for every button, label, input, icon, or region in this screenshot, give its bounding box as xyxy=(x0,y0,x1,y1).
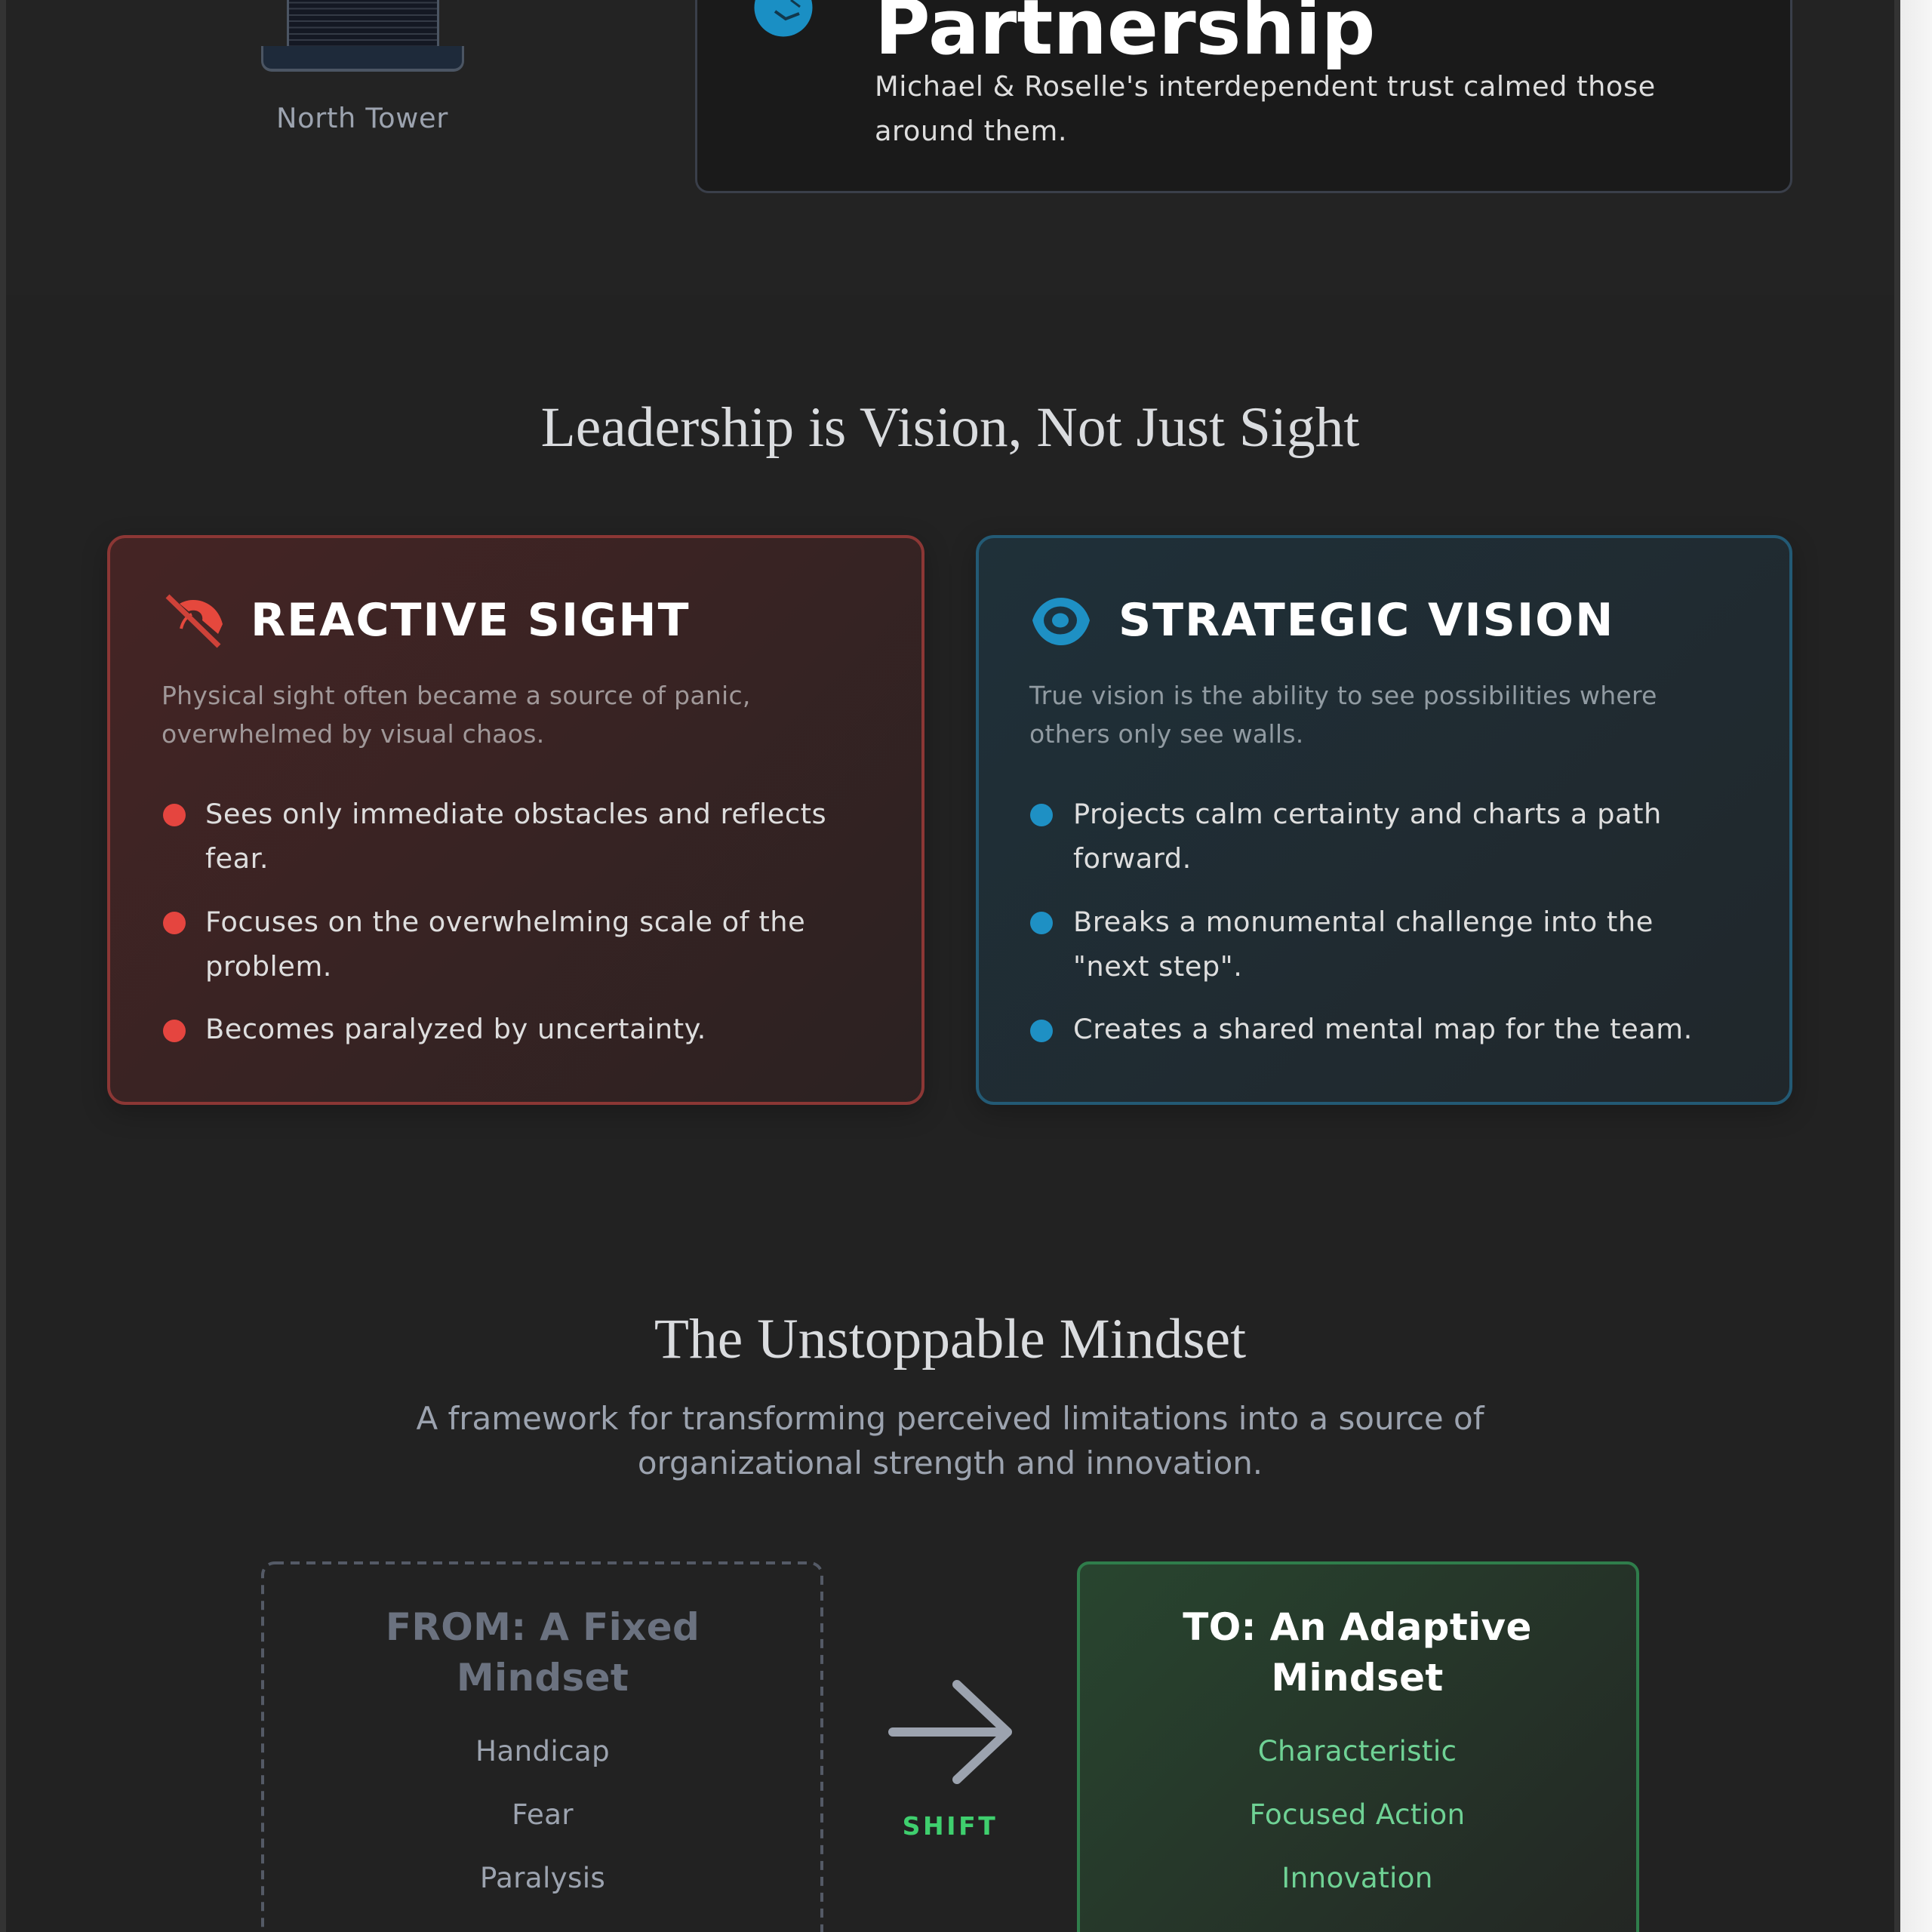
bullet 2 xyxy=(163,912,186,934)
shift label: SHIFT xyxy=(903,1811,998,1841)
bullet 1 xyxy=(163,804,186,826)
adaptive mindset text: Innovation xyxy=(1281,1861,1433,1894)
mindset subtitle: organizational strength and innovation. xyxy=(638,1444,1263,1481)
adaptive mindset text xyxy=(1183,1605,1532,1894)
adaptive mindset text: Mindset xyxy=(1271,1656,1444,1700)
tower label: North Tower xyxy=(276,102,448,134)
reactive bullets: Focuses on the overwhelming scale of the xyxy=(205,906,805,937)
reactive bullets: fear. xyxy=(205,842,269,874)
fixed mindset text: Paralysis xyxy=(480,1861,605,1894)
partnership text: around them. xyxy=(875,115,1067,147)
reactive bullets xyxy=(163,797,826,1044)
left frame edge xyxy=(0,0,6,1932)
adaptive items: Characteristic xyxy=(1258,1734,1457,1767)
bullet 2 xyxy=(1030,912,1053,934)
reactive description: overwhelmed by visual chaos. xyxy=(162,719,545,749)
icon: eye slash xyxy=(166,595,223,648)
heading: mindset: The Unstoppable Mindset xyxy=(654,1308,1246,1371)
icon: handshake xyxy=(755,0,812,36)
fixed mindset text: Fear xyxy=(512,1798,574,1831)
panel: reactive sight xyxy=(107,535,924,1105)
adaptive mindset text: Focused Action xyxy=(1249,1798,1466,1831)
reactive heading: REACTIVE SIGHT xyxy=(251,594,690,647)
reactive bullets: Becomes paralyzed by uncertainty. xyxy=(205,1013,706,1044)
strategic description: others only see walls. xyxy=(1029,719,1304,749)
panel: adaptive mindset xyxy=(1077,1561,1639,1932)
right frame edge xyxy=(1894,0,1900,1932)
bullet 3 xyxy=(1030,1020,1053,1042)
adaptive heading: TO: An Adaptive xyxy=(1183,1605,1532,1649)
page shadow xyxy=(1900,0,1932,1932)
mindset subtitle: A framework for transforming perceived limitations into a source of xyxy=(417,1400,1484,1437)
panel: fixed mindset xyxy=(261,1561,823,1932)
heading: leadership: Leadership is Vision, Not Just Sight xyxy=(541,396,1359,459)
top section background xyxy=(6,0,1894,295)
strategic description xyxy=(1029,681,1657,749)
strategic bullets: Projects calm certainty and charts a path xyxy=(1073,797,1662,830)
fixed heading: FROM: A Fixed xyxy=(386,1605,700,1649)
reactive description xyxy=(162,681,751,749)
strategic bullets: forward. xyxy=(1073,842,1192,874)
bullet 3 xyxy=(163,1020,186,1042)
fixed mindset text: Mindset xyxy=(457,1656,629,1700)
reactive description: Physical sight often became a source of panic, xyxy=(162,681,751,710)
strategic heading: STRATEGIC VISION xyxy=(1118,594,1614,647)
partnership text xyxy=(875,70,1656,147)
partnership text: Michael & Roselle's interdependent trust calmed those xyxy=(875,70,1656,103)
bullet 1 xyxy=(1030,804,1053,826)
strategic bullets: Breaks a monumental challenge into the xyxy=(1073,906,1654,937)
fixed items: Handicap xyxy=(475,1734,610,1767)
strategic bullets: "next step". xyxy=(1073,949,1242,983)
tower shaft xyxy=(287,0,439,46)
strategic bullets xyxy=(1030,797,1693,1044)
reactive bullets: Sees only immediate obstacles and reflects xyxy=(205,797,826,830)
mindset subtitle xyxy=(417,1400,1485,1481)
icon: eye xyxy=(1032,598,1090,645)
reactive bullets: problem. xyxy=(205,949,332,983)
strategic bullets: Creates a shared mental map for the team. xyxy=(1073,1013,1693,1044)
icon: north tower xyxy=(261,0,464,72)
panel: strategic vision xyxy=(976,535,1792,1105)
tower base xyxy=(261,46,464,72)
panel: partnership xyxy=(695,0,1792,193)
arrow: shift xyxy=(888,1680,1012,1784)
fixed mindset text xyxy=(386,1605,700,1894)
strategic description: True vision is the ability to see possibilities where xyxy=(1029,681,1657,710)
